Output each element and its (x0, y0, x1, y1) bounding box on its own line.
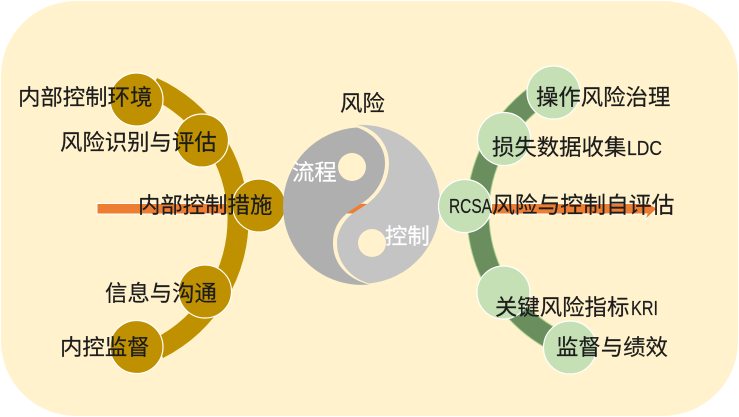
node: RCSA风险与控制自评估: 风险与控制自评估 (492, 192, 674, 218)
node: 关键风险指标KRI: 关键风险指标 (495, 295, 629, 320)
node: 关键风险指标KRI (477, 266, 658, 320)
yang half: 控制 (337, 125, 440, 284)
label: 控制: 控制 (385, 224, 430, 249)
orange sliver (348, 204, 367, 213)
node: 信息与沟通: 信息与沟通 (105, 281, 217, 306)
icon: yin-yang diagram (283, 125, 440, 285)
node: 内部控制措施: 内部控制措施 (138, 193, 272, 218)
node: 内控监督 (60, 320, 163, 374)
node: 风险识别与评估 (60, 114, 228, 167)
lower hole (358, 229, 386, 257)
node: 损失数据收集LDC: LDC (627, 138, 662, 160)
node: 内部控制环境 (18, 73, 163, 126)
right arc band (467, 80, 570, 355)
node: RCSA风险与控制自评估: RCSA (449, 196, 493, 218)
arrow: horizontal orange arrow (97, 202, 658, 220)
node: 损失数据收集LDC: 损失数据收集 (492, 135, 626, 160)
node: 监督与绩效 (544, 321, 668, 374)
node: 内控监督: 内控监督 (60, 335, 150, 360)
label: 流程: 流程 (292, 160, 337, 185)
heading: 风险: 风险 (340, 91, 385, 116)
node: 操作风险治理: 操作风险治理 (536, 85, 670, 110)
yin half: 流程 (283, 128, 385, 285)
node: 内部控制措施 (138, 179, 286, 232)
panel: right arc with nodes (438, 66, 674, 374)
node: 损失数据收集LDC (478, 112, 662, 166)
node: 风险识别与评估: 风险识别与评估 (60, 130, 217, 155)
panel: left arc with nodes (18, 73, 286, 374)
node: 信息与沟通 (105, 265, 232, 318)
node: RCSA风险与控制自评估 (438, 180, 674, 232)
left arc band (148, 78, 249, 358)
node: 监督与绩效: 监督与绩效 (556, 335, 668, 360)
node: 内部控制环境: 内部控制环境 (18, 85, 152, 110)
node: 关键风险指标KRI: KRI (631, 298, 658, 320)
node: 操作风险治理 (527, 66, 670, 119)
upper hole (338, 153, 366, 181)
